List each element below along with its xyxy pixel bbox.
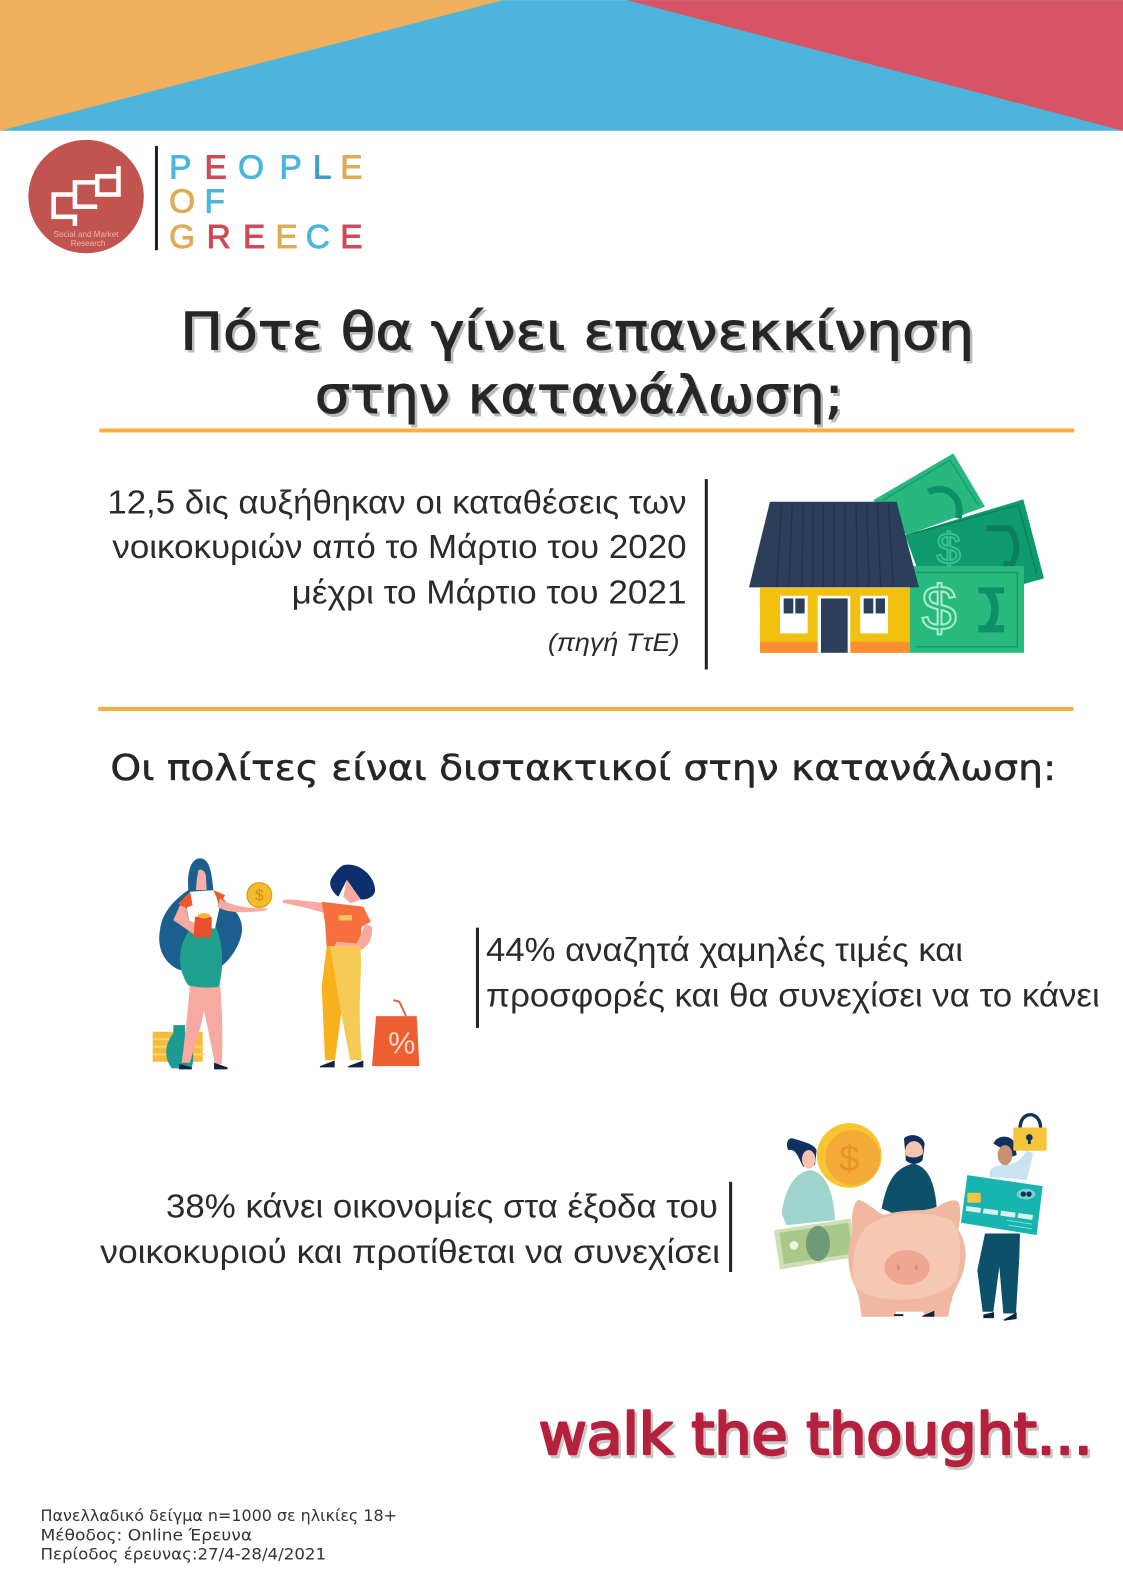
footer: methodology note: Πανελλαδικό δείγμα n=1000 σε ηλικίες 18+	[41, 1506, 397, 1525]
illustration: two women shopping: %	[388, 1026, 415, 1060]
logo: People of Greece wordmark: E	[340, 219, 363, 256]
text block: 38 percent: 38% κάνει οικονομίες στα έξοδα του	[166, 1188, 718, 1225]
section heading: Οι πολίτες είναι διστακτικοί στην κατανάλωση:	[110, 748, 1056, 789]
title: στην κατανάλωση;	[315, 366, 844, 426]
logo: People of Greece wordmark: E	[243, 219, 265, 256]
logo: People of Greece wordmark: E	[275, 219, 298, 256]
title: Πότε θα γίνει επανεκκίνηση	[180, 302, 974, 362]
icon: house with banknotes: $	[922, 574, 957, 644]
logo: Social and Market Research: Social and Market	[54, 230, 119, 239]
illustration: piggy bank savings: $	[839, 1138, 860, 1179]
illustration: two women shopping	[153, 858, 419, 1068]
logo: People of Greece wordmark: L	[313, 149, 331, 186]
illustration: two women shopping: $	[255, 888, 264, 905]
logo: People of Greece wordmark	[169, 149, 363, 256]
header banner	[0, 0, 1123, 131]
logo: People of Greece wordmark: F	[205, 184, 225, 221]
logo: People of Greece wordmark: P	[169, 149, 191, 186]
text block: deposits: (πηγή ΤτΕ)	[548, 629, 679, 657]
text block: 44 percent: 44% αναζητά χαμηλές τιμές και	[486, 932, 963, 969]
icon: house with banknotes: $	[937, 525, 961, 573]
logo: People of Greece wordmark: G	[169, 219, 195, 256]
footer: methodology note	[41, 1506, 397, 1564]
logo: People of Greece wordmark: O	[169, 184, 195, 221]
logo: Social and Market Research: Research	[71, 239, 105, 248]
footer: methodology note: Μέθοδος: Online Έρευνα	[41, 1525, 252, 1544]
slogan: walk the thought: walk the thought...	[541, 1405, 1095, 1471]
logo: Social and Market Research	[28, 140, 144, 253]
logo divider	[155, 146, 158, 250]
logo: People of Greece wordmark: R	[207, 219, 231, 256]
logo: People of Greece wordmark: E	[340, 149, 363, 186]
slogan: walk the thought: walk the thought...	[539, 1402, 1093, 1468]
text block: deposits: νοικοκυριών από το Μάρτιο του 2020	[112, 529, 687, 566]
footer: methodology note: Περίοδος έρευνας:27/4-28/4/2021	[41, 1545, 326, 1564]
text block: 38 percent	[100, 1188, 720, 1271]
text block: 44 percent	[486, 932, 1100, 1015]
logo: People of Greece wordmark: C	[306, 219, 330, 256]
icon: house with banknotes	[749, 453, 1044, 653]
text block: 44 percent: προσφορές και θα συνεχίσει να το κάνει	[486, 978, 1100, 1015]
title: Πότε θα γίνει επανεκκίνηση	[183, 305, 977, 365]
text block: deposits	[107, 485, 687, 657]
logo: People of Greece wordmark: E	[205, 149, 227, 186]
title: στην κατανάλωση;	[317, 369, 846, 429]
text block: 38 percent: νοικοκυριού και προτίθεται να συνεχίσει	[100, 1234, 720, 1271]
illustration: piggy bank savings	[774, 1115, 1047, 1320]
logo: People of Greece wordmark: O	[238, 149, 264, 186]
logo: People of Greece wordmark: P	[279, 149, 302, 186]
title	[180, 302, 977, 429]
text block: deposits: 12,5 δις αυξήθηκαν οι καταθέσεις των	[107, 485, 687, 522]
text block: deposits: μέχρι το Μάρτιο του 2021	[292, 575, 687, 612]
